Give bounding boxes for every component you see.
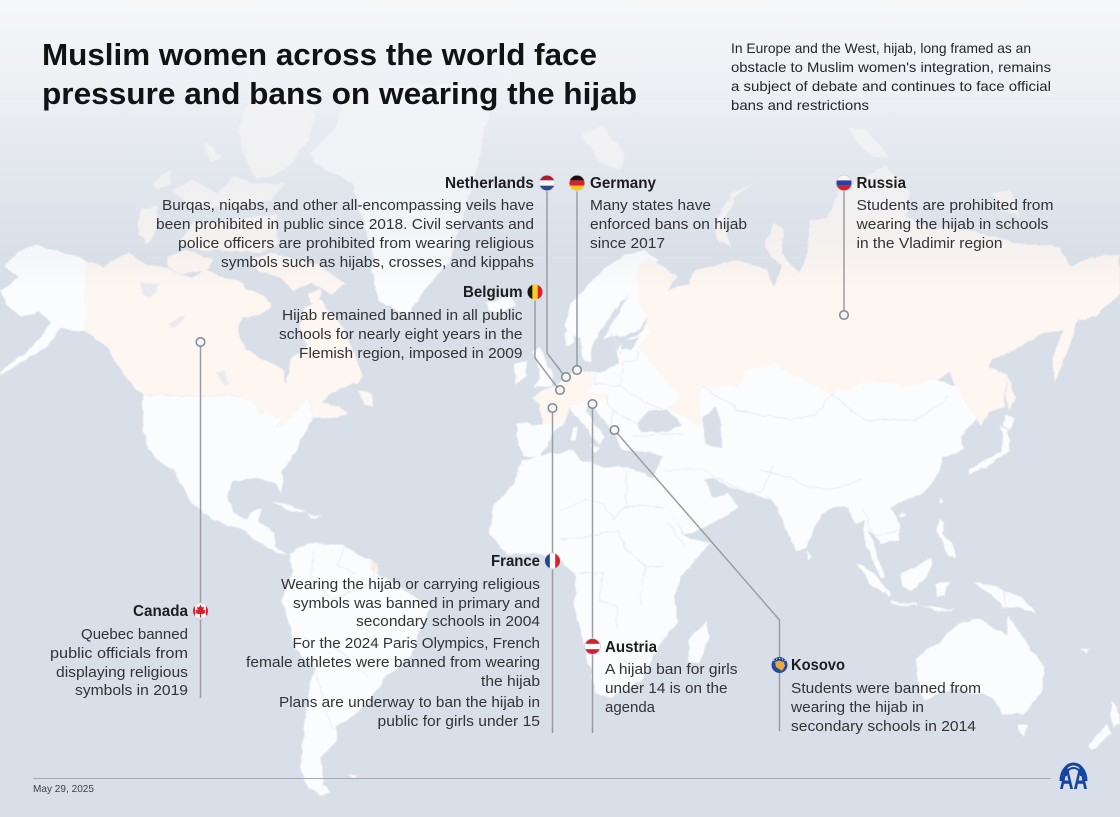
flag: Canada — [192, 603, 209, 619]
text: France planned ban: Plans are underway to ban the hijab in — [279, 694, 540, 711]
leader line: France — [548, 404, 557, 733]
text: Germany: since 2017 — [590, 235, 665, 252]
text: Canada — [50, 626, 188, 699]
text: Germany — [590, 197, 747, 252]
land: western Europe highlighted — [532, 371, 605, 425]
borders: Eurasia — [593, 350, 683, 437]
text: Austria: agenda — [605, 699, 656, 716]
land: Russia — [581, 127, 1120, 430]
intro text — [731, 40, 1051, 113]
date: May 29, 2025 — [33, 783, 94, 795]
heading: Canada: Canada — [133, 603, 188, 620]
flag: Germany — [569, 175, 585, 191]
heading: Netherlands: Netherlands — [445, 175, 534, 192]
land: Denmark, UK, Ireland and other islands — [485, 296, 1015, 475]
text: Netherlands: Burqas, niqabs, and other all-encompassing veils have — [162, 197, 534, 214]
intro text: bans and restrictions — [731, 97, 869, 113]
text: Austria — [605, 661, 738, 716]
heading: France: France — [491, 553, 540, 570]
text: Canada: public officials from — [50, 645, 188, 662]
land: Alaska and Greenland — [0, 85, 490, 397]
leader line: Kosovo — [610, 426, 780, 731]
intro text: obstacle to Muslim women's integration, remains — [731, 59, 1051, 75]
leader line: Canada — [196, 338, 205, 698]
callout: Kosovo — [772, 657, 981, 735]
text: Kosovo — [790, 680, 981, 735]
land: Scandinavia — [564, 250, 660, 362]
water: inland seas — [622, 337, 722, 448]
text: France Olympics: the hijab — [481, 673, 540, 690]
text: Belgium: schools for nearly eight years in the — [279, 326, 522, 343]
land: Indian Ocean and Pacific islands, Australia — [560, 467, 1120, 750]
land: Eurasia — [517, 300, 1000, 578]
text: France Olympics: female athletes were banned from wearing — [246, 654, 540, 671]
text: France Olympics — [246, 635, 540, 690]
text: Canada: displaying religious — [56, 664, 188, 681]
text: Russia: in the Vladimir region — [856, 235, 1002, 252]
heading: Austria: Austria — [605, 639, 657, 656]
flag: Netherlands — [539, 175, 555, 191]
leader line: Netherlands — [547, 190, 570, 381]
intro text: In Europe and the West, hijab, long framed as an — [731, 40, 1031, 56]
heading: Belgium: Belgium — [463, 284, 522, 301]
callout: Germany — [569, 175, 747, 252]
text: Germany: enforced bans on hijab — [590, 216, 747, 233]
land: USA, Mexico and Central America — [143, 396, 314, 555]
text: Netherlands: symbols such as hijabs, crosses, and kippahs — [221, 254, 534, 271]
text: France school ban: secondary schools in 2004 — [356, 613, 540, 630]
text: Netherlands — [156, 197, 534, 271]
text: Belgium — [279, 307, 523, 362]
callout: Netherlands — [156, 175, 555, 271]
text: Netherlands: police officers are prohibited from wearing religious — [178, 235, 534, 252]
text: France planned ban: public for girls under 15 — [378, 713, 540, 730]
flag: Belgium — [527, 284, 543, 300]
text: Russia: Students are prohibited from — [856, 197, 1054, 214]
logo: AA — [1060, 763, 1088, 796]
heading: Kosovo: Kosovo — [791, 657, 845, 674]
text: Germany: Many states have — [590, 197, 711, 214]
land: South America and Caribbean — [271, 502, 432, 797]
flag: Kosovo — [772, 657, 788, 673]
text: France school ban: symbols was banned in primary and — [293, 595, 540, 612]
text: Kosovo: secondary schools in 2014 — [791, 718, 976, 735]
text: Austria: A hijab ban for girls — [605, 661, 738, 678]
callout: Belgium — [279, 284, 543, 362]
text: Belgium: Hijab remained banned in all public — [282, 307, 523, 324]
text: Kosovo: wearing the hijab in — [790, 699, 924, 716]
text: France Olympics: For the 2024 Paris Olympics, French — [292, 635, 540, 652]
text: Canada: Quebec banned — [81, 626, 188, 643]
callout: Canada — [50, 603, 209, 699]
text: Kosovo: Students were banned from — [791, 680, 981, 697]
text: Russia: wearing the hijab in schools — [855, 216, 1048, 233]
text: Canada: symbols in 2019 — [75, 682, 188, 699]
title — [42, 37, 637, 111]
footer rule — [33, 778, 1051, 780]
leader line: Russia — [840, 190, 848, 319]
text: Belgium: Flemish region, imposed in 2009 — [299, 345, 522, 362]
leader line: Belgium — [535, 298, 564, 394]
text: France school ban: Wearing the hijab or carrying religious — [281, 576, 540, 593]
land: Canada — [86, 92, 375, 428]
title: pressure and bans on wearing the hijab — [42, 76, 637, 111]
text: Austria: under 14 is on the — [605, 680, 728, 697]
text: Russia — [855, 197, 1054, 252]
flag: Austria — [584, 638, 601, 655]
leader line: Germany — [573, 190, 581, 374]
heading: Germany: Germany — [590, 175, 656, 192]
text: Netherlands: been prohibited in public since 2018. Civil servants and — [156, 216, 534, 233]
land: Africa — [489, 450, 710, 698]
flag: Russia — [836, 175, 852, 191]
callout: France — [246, 553, 561, 730]
top fade overlay — [0, 0, 1120, 290]
callout: Austria — [584, 638, 738, 716]
text: France school ban — [281, 576, 540, 630]
leader line: Austria — [588, 400, 597, 733]
intro text: a subject of debate and continues to face official — [731, 78, 1051, 94]
flag: France — [544, 553, 561, 569]
text: France planned ban — [279, 694, 540, 730]
logo: AA: AA — [1060, 763, 1088, 796]
title: Muslim women across the world face — [42, 37, 597, 72]
heading: Russia: Russia — [856, 175, 906, 192]
callout: Russia — [836, 175, 1054, 252]
